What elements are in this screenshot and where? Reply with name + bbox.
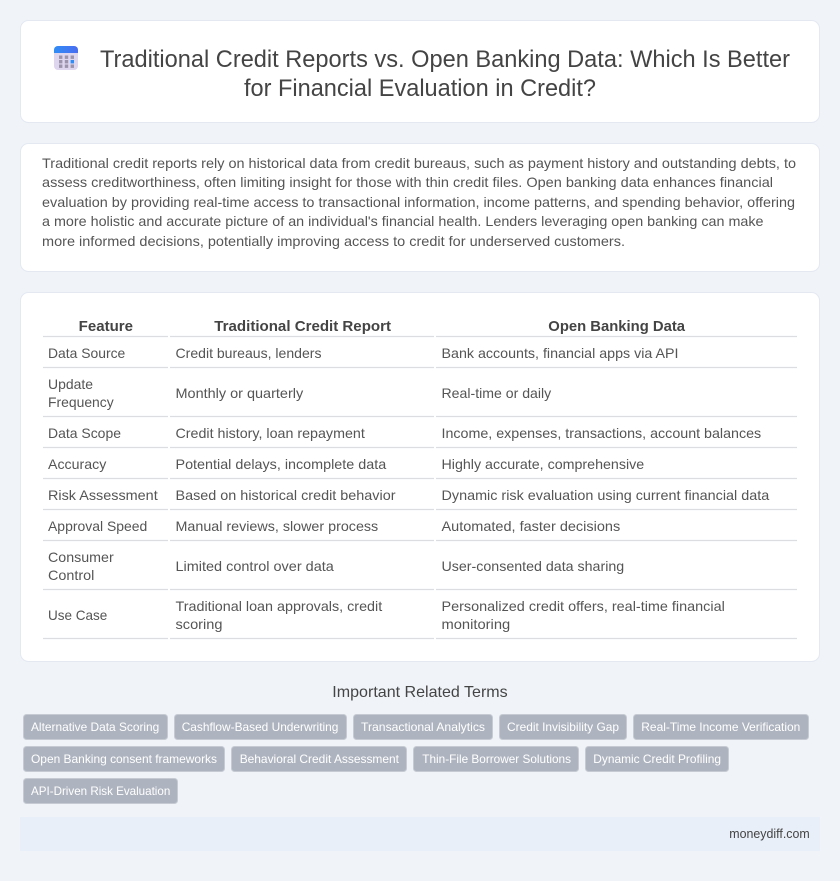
heading: important related terms: Important Related Terms <box>332 684 508 701</box>
section: related terms <box>24 684 808 804</box>
table row: use case: monitoring <box>442 616 510 632</box>
table row: data scope: Credit history, loan repayment <box>176 425 365 441</box>
table row: use case: Use Case <box>48 607 108 623</box>
table header: Open Banking Data <box>548 318 686 335</box>
table row: consumer control <box>43 549 797 590</box>
panel: summary <box>20 144 820 272</box>
table row: update frequency: Real-time or daily <box>442 385 551 401</box>
table row: data source: Bank accounts, financial apps via API <box>442 345 678 361</box>
tag: behavioral credit assessment <box>232 746 406 772</box>
table row: use case: scoring <box>176 616 222 632</box>
tag: dynamic credit profiling <box>586 746 728 772</box>
table row: risk assessment: Dynamic risk evaluation using current financial data <box>442 487 769 503</box>
tag: thin-file borrower solutions <box>414 746 578 772</box>
footer credit: moneydiff.com <box>729 827 810 841</box>
title <box>100 46 790 102</box>
text block: summary paragraph: more informed decisions, potentially improving access to credit for underserved customers. <box>42 233 625 249</box>
table row: update frequency: Frequency <box>48 394 114 410</box>
table row: approval speed: Approval Speed <box>48 518 147 534</box>
tag: credit invisibility gap <box>500 714 626 740</box>
tag: real-time income verification <box>634 714 808 740</box>
table row: risk assessment: Based on historical credit behavior <box>176 487 396 503</box>
text block: summary paragraph: a more holistic and accurate picture of an individual's financial health. Lenders leveraging open banking can make <box>42 213 764 229</box>
table row: consumer control: Control <box>48 567 94 583</box>
table row: use case <box>43 598 797 638</box>
table header <box>43 318 797 336</box>
table header: Traditional Credit Report <box>214 318 391 335</box>
table row: approval speed <box>43 518 797 540</box>
tag: real-time income verification: Real-Time Income Verification <box>641 720 800 734</box>
tag: dynamic credit profiling: Dynamic Credit Profiling <box>593 752 721 766</box>
table row: accuracy: Potential delays, incomplete data <box>176 456 386 472</box>
text block: summary paragraph <box>42 155 796 249</box>
table row: data source: Credit bureaus, lenders <box>176 345 322 361</box>
table row: data scope: Data Scope <box>48 425 121 441</box>
text block: summary paragraph: Traditional credit reports rely on historical data from credit bureaus, such as payment history and outstanding debts, to <box>42 155 796 171</box>
tag: cashflow-based underwriting: Cashflow-Based Underwriting <box>182 720 338 734</box>
tag: alternative data scoring: Alternative Data Scoring <box>31 720 159 734</box>
tag: transactional analytics: Transactional Analytics <box>361 720 485 734</box>
table row: data source: Data Source <box>48 345 126 361</box>
table row: approval speed: Manual reviews, slower process <box>176 518 378 534</box>
table row: consumer control: Limited control over data <box>176 558 334 574</box>
table row: update frequency <box>43 376 797 416</box>
table row: consumer control: Consumer <box>48 549 114 565</box>
table row: use case: Personalized credit offers, real-time financial <box>442 598 725 614</box>
table row: data scope <box>43 425 797 448</box>
table header: Feature <box>79 318 133 335</box>
tag: transactional analytics <box>354 714 492 740</box>
table row: data scope: Income, expenses, transactions, account balances <box>442 425 761 441</box>
table row: risk assessment: Risk Assessment <box>48 487 158 503</box>
icon: calendar <box>54 46 78 70</box>
tag: thin-file borrower solutions: Thin-File Borrower Solutions <box>422 752 571 766</box>
table row: risk assessment <box>43 487 797 510</box>
tag: behavioral credit assessment: Behavioral Credit Assessment <box>240 752 400 766</box>
table row: approval speed: Automated, faster decisions <box>442 518 620 534</box>
tag: open banking consent frameworks <box>24 746 224 772</box>
text block: summary paragraph: assess creditworthiness, often limiting insight for those with thin credit files. Open banking data enhances financial <box>42 174 773 190</box>
tag: open banking consent frameworks: Open Banking consent frameworks <box>31 752 217 766</box>
table row: accuracy: Highly accurate, comprehensive <box>442 456 644 472</box>
tag: credit invisibility gap: Credit Invisibility Gap <box>507 720 619 734</box>
table row: accuracy: Accuracy <box>48 456 106 472</box>
table row: use case: Traditional loan approvals, credit <box>176 598 382 614</box>
tag: cashflow-based underwriting <box>174 714 346 740</box>
footer <box>20 817 820 851</box>
table row: update frequency: Monthly or quarterly <box>176 385 303 401</box>
panel: title card <box>20 20 820 122</box>
tag: alternative data scoring <box>24 714 168 740</box>
text block: summary paragraph: evaluation by providing real-time access to transactional information, income patterns, and spending behavior, offering <box>42 194 795 210</box>
title: for Financial Evaluation in Credit? <box>244 75 596 102</box>
tag: api-driven risk evaluation <box>24 778 178 804</box>
table row: data source <box>43 345 797 368</box>
panel: comparison table <box>20 292 820 662</box>
table row: consumer control: User-consented data sharing <box>442 558 624 574</box>
table row: update frequency: Update <box>48 376 93 392</box>
tag: api-driven risk evaluation: API-Driven Risk Evaluation <box>31 784 170 798</box>
table row: accuracy <box>43 456 797 478</box>
title: Traditional Credit Reports vs. Open Banking Data: Which Is Better <box>100 46 790 73</box>
